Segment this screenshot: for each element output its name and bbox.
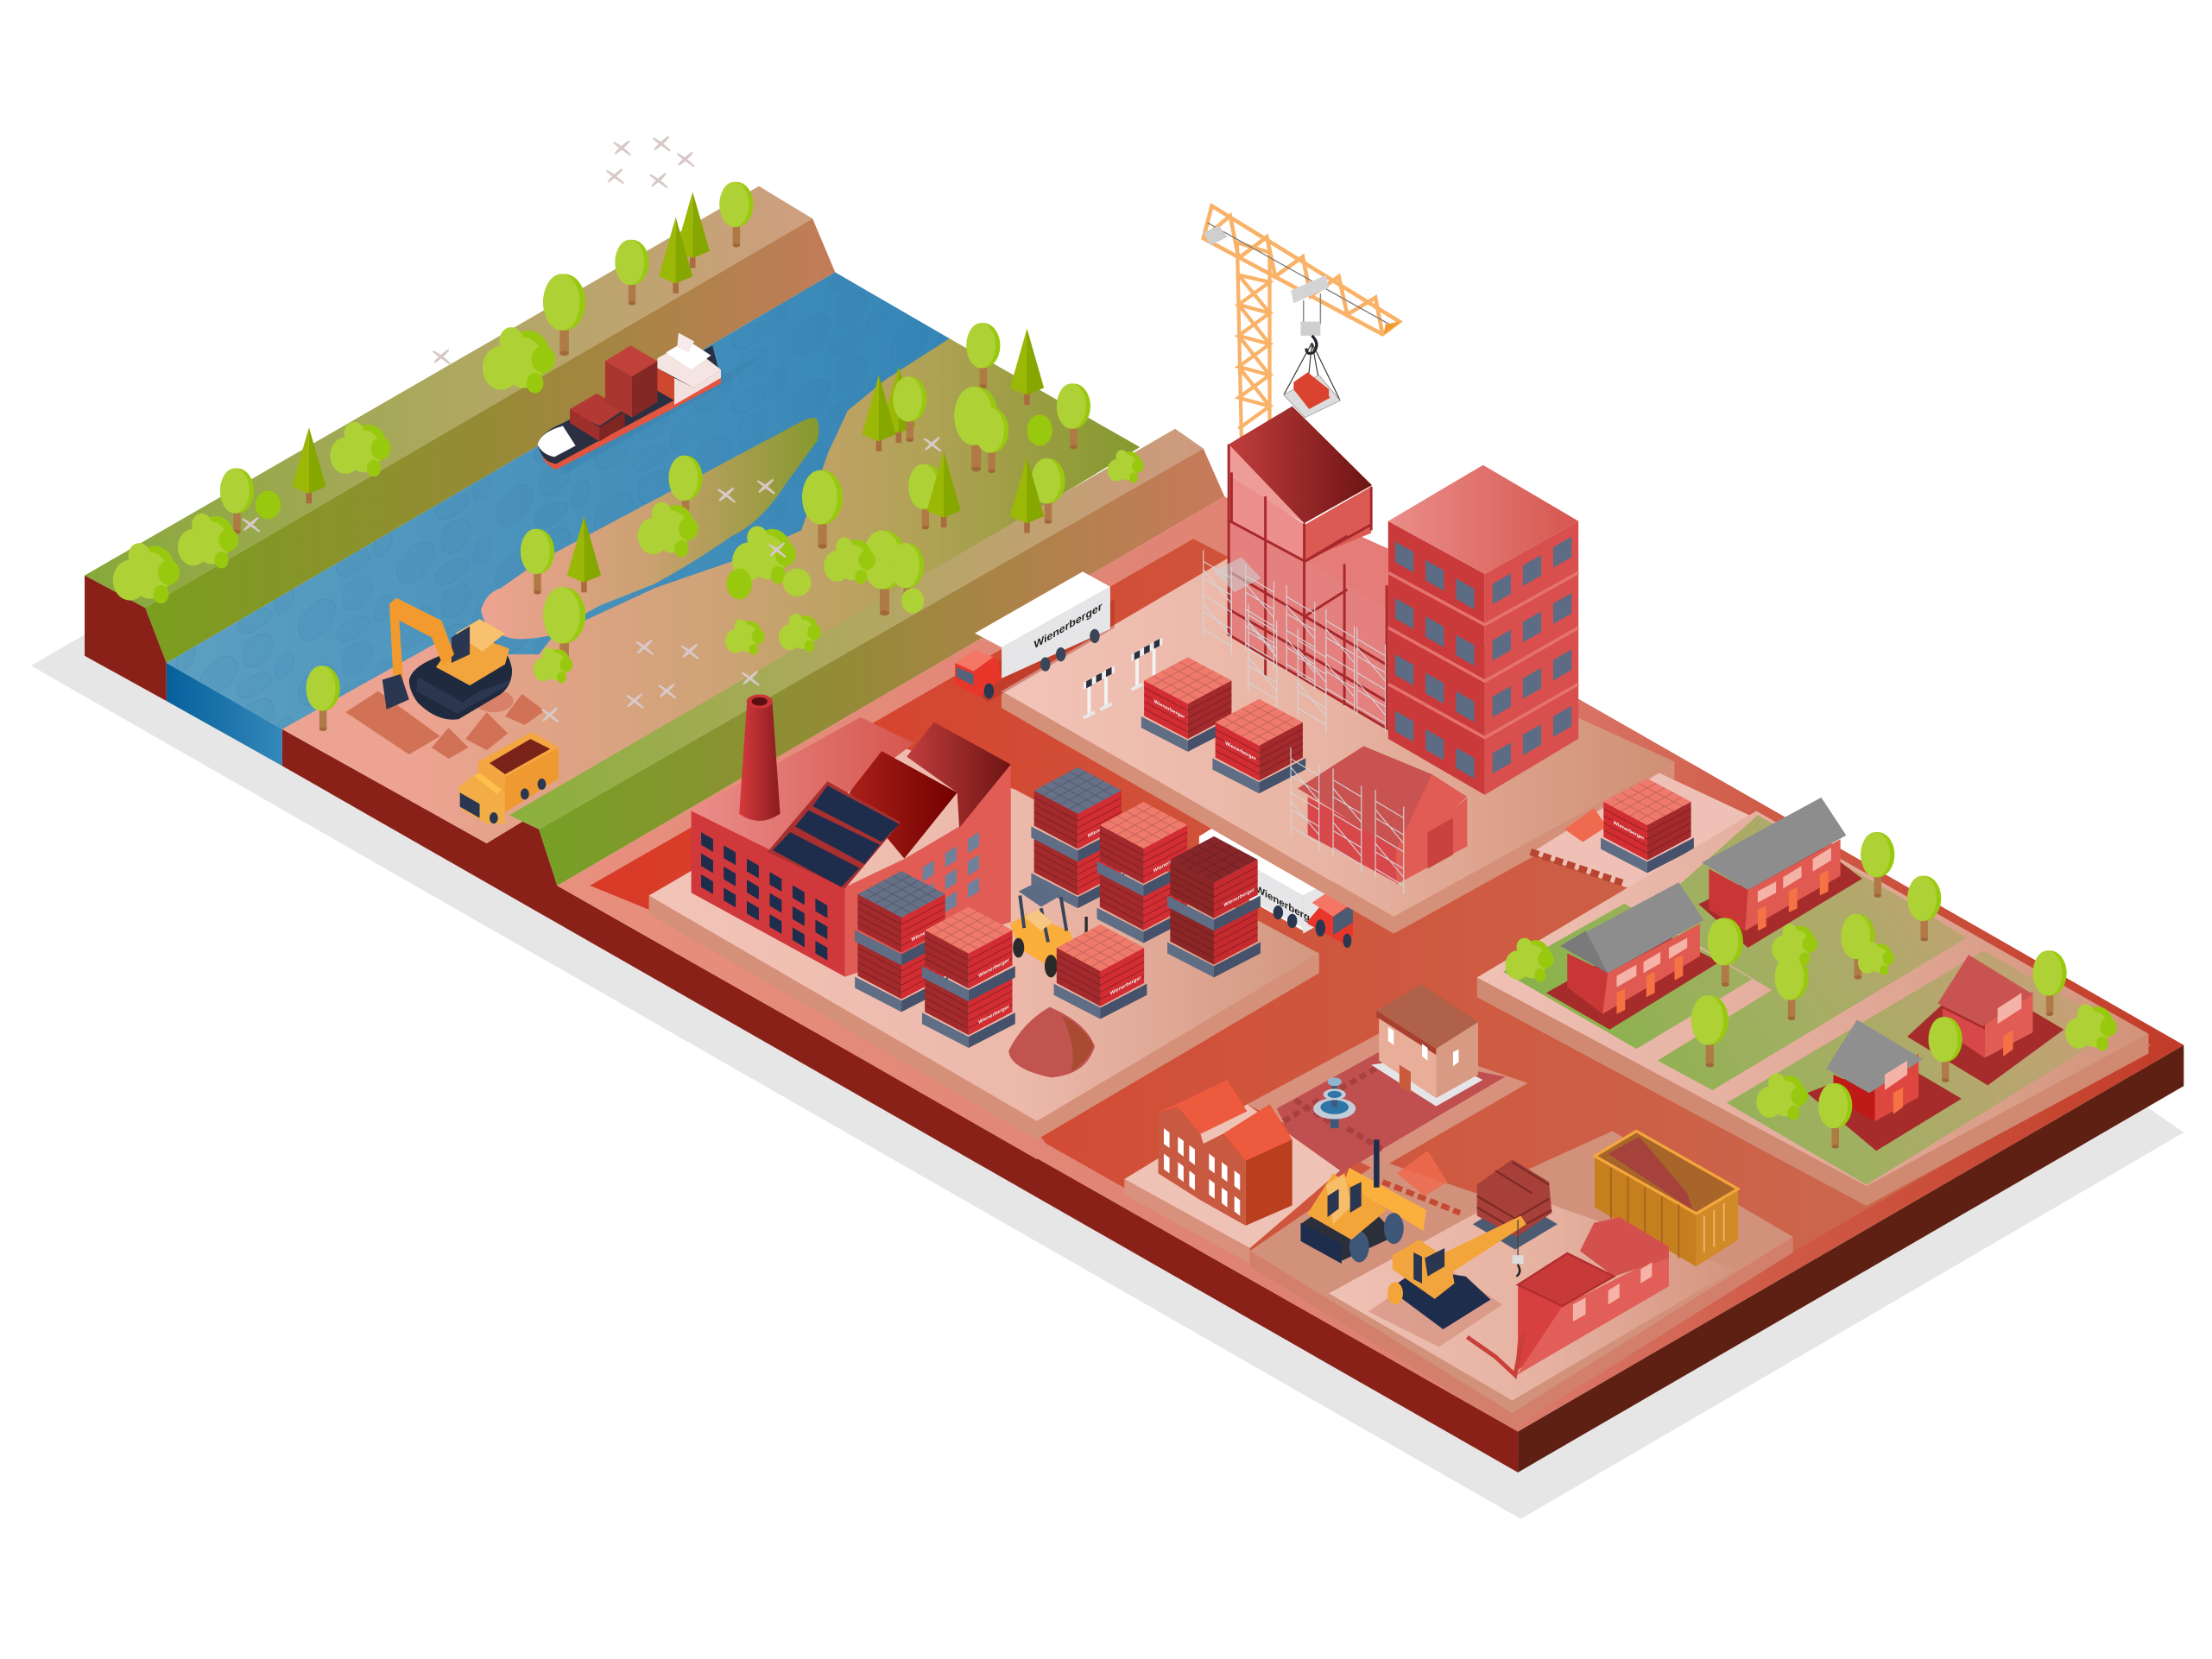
dump truck xyxy=(458,732,559,823)
hook and rigging xyxy=(1284,275,1340,418)
pallet one xyxy=(1141,657,1235,752)
mobile crane xyxy=(1368,1215,1526,1347)
Dutch houses plot xyxy=(1124,1104,1340,1248)
roof gable xyxy=(1229,445,1305,523)
tower concrete base of crane xyxy=(1213,557,1261,592)
small house under scaffolding xyxy=(1291,746,1467,894)
delivery truck: Wienerberger xyxy=(1255,882,1319,930)
factory building xyxy=(692,695,1011,977)
floor rim xyxy=(557,496,2184,1431)
forklift xyxy=(1010,881,1086,977)
pallet stack: coral back xyxy=(1097,802,1190,943)
far embankment xyxy=(85,186,835,663)
panel: residential plot xyxy=(1477,798,2148,1206)
panel: four storey brick tower xyxy=(1388,465,1578,795)
base left side wall xyxy=(85,576,1518,1473)
structure frame xyxy=(1229,445,1388,729)
pallet stack: grey back: Wienerberger xyxy=(1088,818,1119,839)
pallet stack: grey back xyxy=(1031,767,1124,908)
river water xyxy=(167,272,950,729)
pallet two xyxy=(1212,699,1305,793)
sawtooth roofs xyxy=(907,722,1011,828)
tower right face xyxy=(1485,521,1578,795)
pallet two: Wienerberger xyxy=(1225,741,1256,762)
house four xyxy=(1907,955,2063,1085)
scattered bricks xyxy=(1382,1151,1460,1213)
ground shadow xyxy=(31,634,2184,1519)
panel: building under construction xyxy=(1204,407,1388,734)
panel: city floor xyxy=(557,496,2184,1431)
pallet stack: coral back: Wienerberger xyxy=(1153,853,1185,874)
ship xyxy=(538,333,762,474)
tower left face xyxy=(1388,521,1485,795)
pallet single xyxy=(1054,924,1147,1019)
pallet stack: grey front xyxy=(855,871,948,1012)
base right side wall xyxy=(1518,1045,2184,1473)
bulldozer xyxy=(1300,1139,1426,1264)
pallet one: Wienerberger xyxy=(1154,699,1185,721)
brick pallet pile xyxy=(1473,1159,1558,1250)
brick stacks and forklift on factory plot xyxy=(855,767,1353,1077)
near embankment xyxy=(509,429,1224,886)
rim strip in front of factory plot xyxy=(565,884,1051,1159)
truck with trailer: Wienerberger xyxy=(1034,600,1103,651)
pallets on construction plot xyxy=(1141,657,1305,793)
tower roof xyxy=(1388,465,1578,574)
house two xyxy=(1698,798,1862,948)
trees on river landscape xyxy=(113,182,1144,731)
crane jib xyxy=(1204,206,1400,334)
scaffolding xyxy=(1204,550,1386,734)
pallet single: Wienerberger xyxy=(1110,975,1141,997)
back sawtooth wall xyxy=(845,765,1011,977)
birds xyxy=(243,136,941,722)
excavation pit xyxy=(345,690,545,759)
fountain xyxy=(1313,1077,1356,1128)
pallet three xyxy=(1601,779,1694,873)
clay pile xyxy=(1008,1007,1095,1077)
water side wall xyxy=(167,663,282,766)
house three xyxy=(1807,1019,1962,1151)
delivery truck xyxy=(1199,821,1353,948)
panel: construction plot xyxy=(1002,558,1674,934)
crane xyxy=(1204,206,1400,438)
pitched roof xyxy=(1229,407,1372,523)
panel: factory plot xyxy=(649,747,1319,1139)
lawns xyxy=(1503,815,2120,1185)
panel: demolition plot xyxy=(1124,1080,1793,1429)
cargo of bricks xyxy=(570,345,657,441)
river bank land xyxy=(282,338,1140,843)
pallet stack: coral front: Wienerberger xyxy=(978,957,1010,979)
left wall xyxy=(692,811,845,977)
pallet stack: coral front xyxy=(922,907,1015,1048)
ruined house xyxy=(1467,1217,1669,1375)
panel: river landscape xyxy=(85,136,1224,886)
excavator xyxy=(382,598,512,720)
plot with pallet and loose bricks xyxy=(1531,773,1749,888)
plaza paving xyxy=(1277,1052,1505,1188)
pale front area xyxy=(1329,1192,1735,1400)
truck with trailer xyxy=(955,571,1115,703)
factory windows xyxy=(701,832,979,961)
chimney xyxy=(739,695,781,821)
Dutch gabled houses xyxy=(1158,1080,1292,1226)
tower windows xyxy=(1395,537,1571,779)
flat roof xyxy=(692,717,914,852)
platform base xyxy=(85,576,2184,1473)
road surface xyxy=(590,539,2152,1410)
pallet three: Wienerberger xyxy=(1614,820,1645,842)
pallet stack: dark xyxy=(1167,836,1261,977)
house one xyxy=(1546,882,1720,1030)
container xyxy=(1595,1131,1738,1266)
pallet stack: dark: Wienerberger xyxy=(1223,887,1255,908)
upper storey xyxy=(1229,472,1305,560)
tower walls xyxy=(1229,522,1388,729)
pallet stack: coral front: Wienerberger xyxy=(978,1004,1010,1025)
trees and shrubs on residential plot xyxy=(1505,832,2117,1149)
road barriers xyxy=(1084,638,1162,718)
panel: plaza plot xyxy=(1247,984,1528,1188)
peninsula xyxy=(481,418,818,639)
pallet stack: grey front: Wienerberger xyxy=(912,922,943,943)
crane mast xyxy=(1237,243,1270,438)
old house xyxy=(1371,984,1482,1107)
solar roof xyxy=(768,781,901,888)
